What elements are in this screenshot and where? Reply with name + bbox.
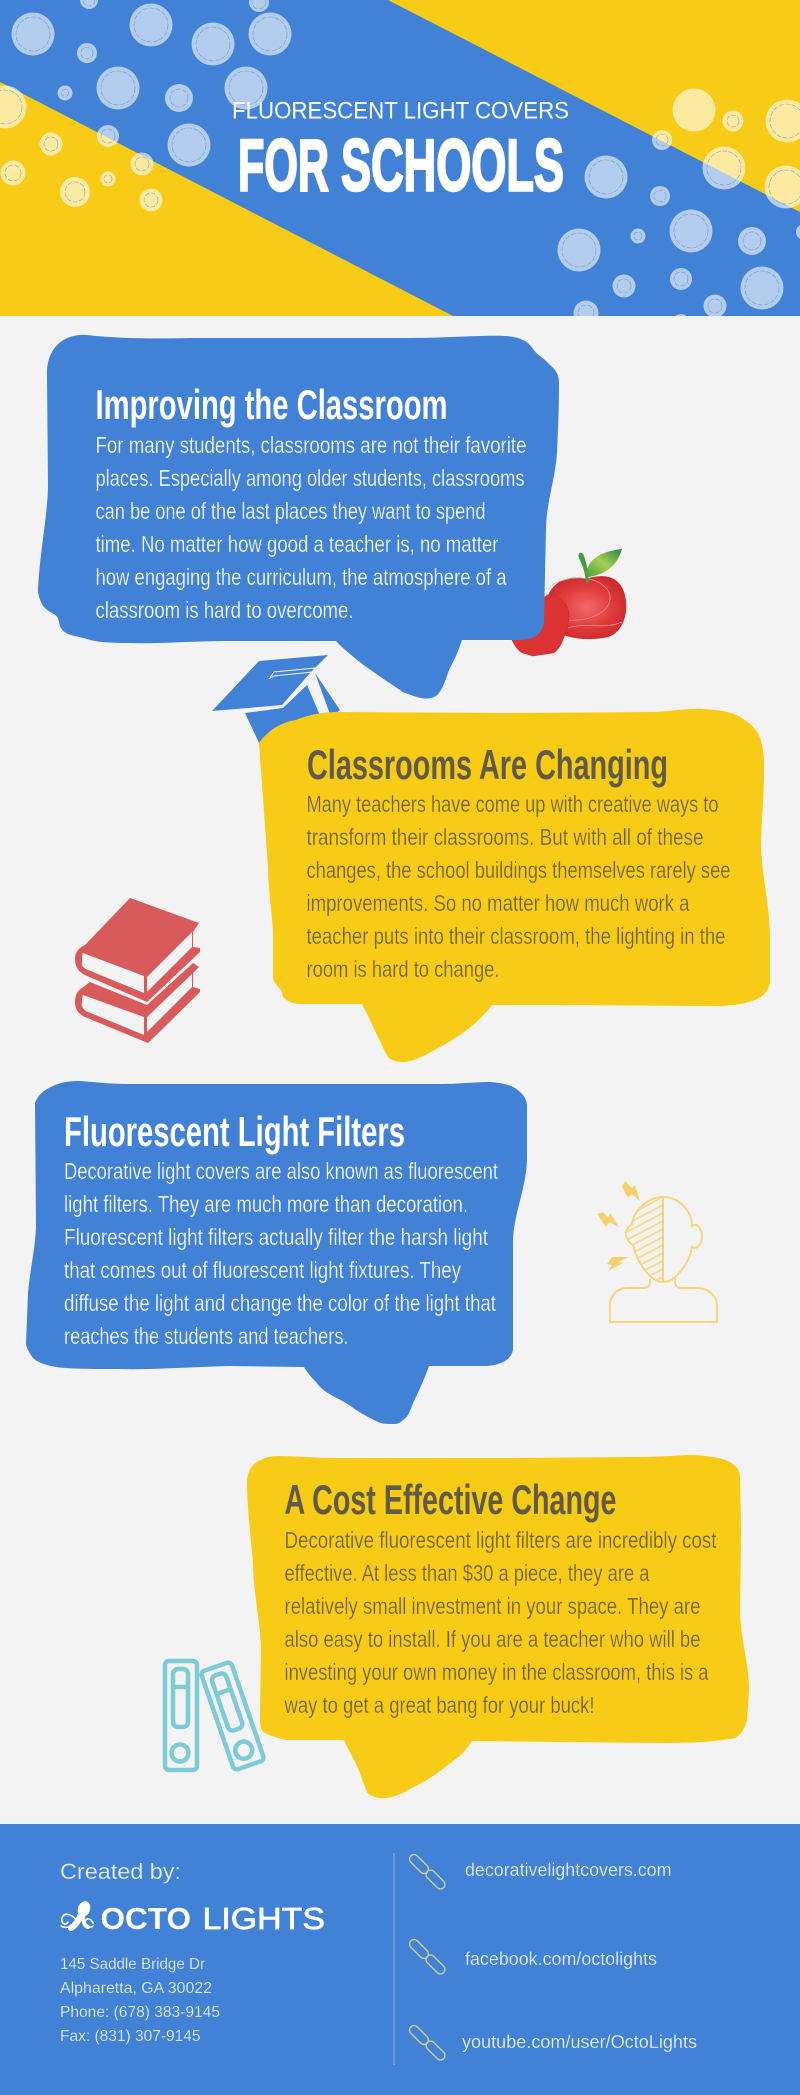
address: 145 Saddle Bridge Dr: [60, 1956, 206, 1973]
body text: places. Especially among older students, classrooms: [96, 465, 524, 491]
body text: how engaging the curriculum, the atmosphere of a: [96, 564, 507, 590]
icon: binders: [165, 1661, 265, 1770]
body text: effective. At less than $30 a piece, they are a: [284, 1560, 650, 1586]
body text: light filters. They are much more than decoration.: [64, 1191, 468, 1217]
address: [60, 1956, 220, 2045]
body text: classroom is hard to overcome.: [96, 597, 354, 623]
panel: fluorescent light filters: [26, 1081, 527, 1424]
body text: relatively small investment in your space. They are: [284, 1593, 700, 1619]
speech bubble: [259, 709, 770, 1062]
body text: [284, 1527, 717, 1718]
title: SCHOOLS: [341, 126, 564, 206]
body text: reaches the students and teachers.: [64, 1323, 348, 1349]
address: Phone: (678) 383-9145: [60, 2004, 220, 2021]
speech bubble: [38, 335, 559, 699]
body text: transform their classrooms. But with all of these: [306, 824, 704, 850]
panel: classrooms are changing: [259, 709, 770, 1062]
body text: Fluorescent light filters actually filter the harsh light: [64, 1224, 488, 1250]
youtube link: youtube.com/user/OctoLights: [462, 2032, 697, 2052]
body text: can be one of the last places they want to spend: [96, 498, 486, 524]
icon: octopus: [61, 1899, 93, 1928]
speech bubble: [26, 1081, 527, 1424]
body text: diffuse the light and change the color of the light that: [64, 1290, 496, 1316]
body text: [96, 432, 526, 623]
title: FLUORESCENT LIGHT COVERS: [232, 98, 569, 124]
created by label: Created by:: [60, 1859, 181, 1884]
heading: Improving the Classroom: [96, 381, 448, 428]
facebook link: facebook.com/octolights: [465, 1949, 657, 1969]
icon: link: [408, 1938, 447, 1976]
footer: [0, 1824, 800, 2095]
icon: link: [408, 2024, 447, 2062]
icon: head with lightning: [597, 1181, 717, 1322]
title: FOR: [238, 126, 329, 206]
body text: For many students, classrooms are not their favorite: [96, 432, 526, 458]
body text: Decorative fluorescent light filters are incredibly cost: [284, 1527, 717, 1553]
body text: room is hard to change.: [306, 956, 500, 982]
body text: [64, 1158, 498, 1349]
decorative light circles: [0, 0, 800, 330]
body text: Decorative light covers are also known as fluorescent: [64, 1158, 498, 1184]
heading: Fluorescent Light Filters: [64, 1108, 405, 1155]
header banner: [0, 0, 800, 330]
body text: way to get a great bang for your buck!: [284, 1692, 594, 1718]
facebook link: [408, 1938, 657, 1976]
address: Alpharetta, GA 30022: [60, 1980, 212, 1997]
icon: stacked books: [75, 898, 200, 1043]
icon: link: [408, 1853, 447, 1891]
panel: improving the classroom: [38, 335, 559, 699]
website link: [408, 1853, 672, 1891]
body text: improvements. So no matter how much work a: [306, 890, 690, 916]
panel: a cost effective change: [247, 1455, 749, 1798]
logo: octo lights: OCTO: [100, 1901, 191, 1936]
heading: A Cost Effective Change: [284, 1476, 616, 1523]
body text: [306, 791, 730, 982]
address: Fax: (831) 307-9145: [60, 2028, 201, 2045]
logo: octo lights: [61, 1899, 325, 1936]
website link: decorativelightcovers.com: [465, 1860, 672, 1880]
youtube link: [408, 2024, 697, 2062]
body text: also easy to install. If you are a teacher who will be: [284, 1626, 700, 1652]
icon: apple: [512, 549, 626, 656]
speech bubble: [247, 1455, 749, 1798]
body text: that comes out of fluorescent light fixtures. They: [64, 1257, 461, 1283]
logo: octo lights: LIGHTS: [202, 1901, 325, 1936]
body text: investing your own money in the classroom, this is a: [284, 1659, 709, 1685]
title: [232, 98, 569, 206]
icon: graduation cap: [212, 655, 340, 745]
body text: time. No matter how good a teacher is, no matter: [96, 531, 499, 557]
